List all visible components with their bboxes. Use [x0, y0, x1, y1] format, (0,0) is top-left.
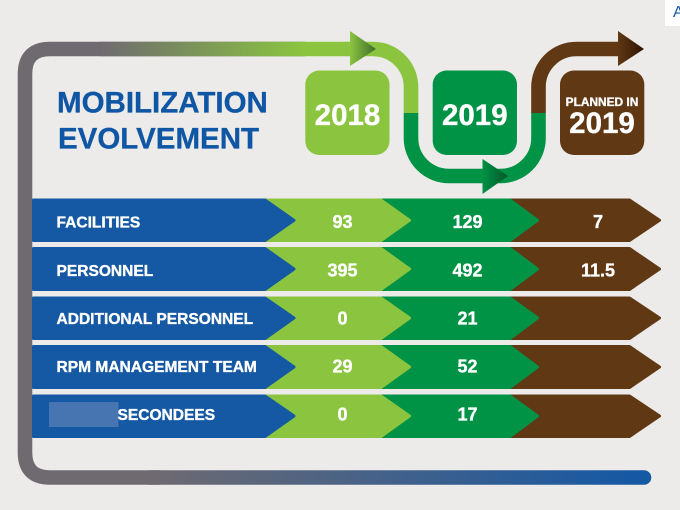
year box: planned in 2019: 2019 [569, 107, 635, 140]
arrowhead: dark green [482, 159, 508, 194]
row: secondees: 17 [457, 404, 478, 424]
row: personnel: PERSONNEL [56, 263, 154, 280]
year box: 2019 [433, 70, 517, 155]
row: personnel: 492 [452, 260, 483, 280]
row: rpm management team: 52 [457, 356, 478, 376]
arrowhead: light green [350, 31, 376, 66]
arrowhead: brown [618, 31, 644, 66]
row: rpm management team: 29 [332, 356, 353, 376]
year box: planned in 2019 [560, 70, 644, 155]
row: additional personnel: ADDITIONAL PERSONNEL [56, 311, 254, 328]
row: personnel: 11.5 [581, 260, 615, 280]
flow line: dark green segment [411, 113, 538, 176]
row: rpm management team: RPM MANAGEMENT TEAM [56, 359, 257, 376]
row: additional personnel: 0 [337, 308, 348, 328]
flow line: light green segment [350, 49, 411, 113]
row: personnel [34, 248, 660, 290]
frame line: left, top and bottom [25, 49, 644, 478]
year box: planned in 2019: PLANNED IN [566, 95, 638, 109]
row: facilities: 129 [452, 212, 483, 232]
corner logo fragment [665, 0, 680, 26]
title line 2: EVOLVEMENT [58, 122, 259, 156]
row: facilities: FACILITIES [56, 214, 140, 232]
year box: 2018: 2018 [315, 99, 380, 132]
row: facilities: 93 [332, 212, 353, 232]
row: additional personnel: 21 [457, 308, 478, 328]
year box: 2018 [305, 70, 390, 155]
row: additional personnel [34, 298, 660, 338]
row: secondees [34, 396, 660, 436]
row: secondees: 0 [337, 404, 348, 424]
row: rpm management team [34, 346, 660, 388]
row: facilities: 7 [593, 212, 603, 232]
flow line: brown segment [538, 49, 620, 113]
row: facilities [34, 200, 660, 240]
row: personnel: 395 [327, 260, 358, 280]
row: secondees: SECONDEES [118, 407, 215, 424]
year box: 2019: 2019 [442, 99, 508, 132]
title: MOBILIZATION [57, 86, 268, 120]
